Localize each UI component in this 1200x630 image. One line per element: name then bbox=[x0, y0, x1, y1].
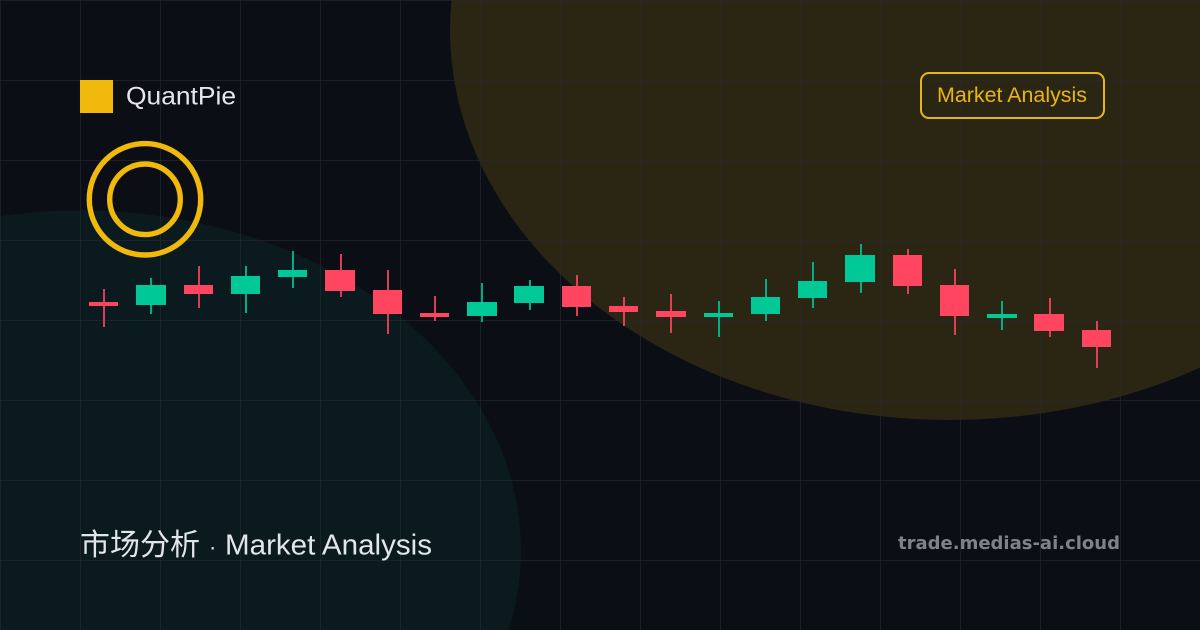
candle 10 bbox=[514, 280, 544, 310]
candle 4 bbox=[231, 266, 260, 313]
candle 16 bbox=[798, 262, 827, 308]
subtitle: 市场分析 bbox=[80, 529, 200, 562]
brand name: QuantPie bbox=[126, 82, 236, 110]
candlestick chart bbox=[89, 244, 1111, 368]
logo bbox=[80, 80, 236, 113]
candle 20 bbox=[987, 301, 1017, 330]
candle 9 bbox=[467, 283, 497, 322]
candle 2 bbox=[136, 278, 166, 314]
subtitle bbox=[80, 529, 432, 562]
candle 21 bbox=[1034, 298, 1064, 337]
candle 18 bbox=[893, 249, 922, 294]
candle 1 bbox=[89, 289, 118, 327]
candle 7 bbox=[373, 270, 402, 334]
badge: market analysis: Market Analysis bbox=[937, 84, 1087, 107]
candle 22 bbox=[1082, 321, 1111, 368]
candle 12 bbox=[609, 297, 638, 326]
candle 14 bbox=[704, 301, 733, 337]
gold background ellipse bbox=[450, 0, 1200, 420]
icon: concentric rings bbox=[89, 144, 201, 255]
subtitle: Market Analysis bbox=[225, 530, 432, 562]
candle 11 bbox=[562, 275, 591, 316]
candle 17 bbox=[845, 244, 875, 293]
candle 6 bbox=[325, 254, 355, 297]
domain footer: trade.medias-ai.cloud bbox=[898, 533, 1120, 554]
subtitle: · bbox=[209, 534, 216, 560]
teal background ellipse bbox=[0, 210, 521, 630]
candle 15 bbox=[751, 279, 780, 321]
candle 13 bbox=[656, 294, 686, 333]
candle 5 bbox=[278, 251, 307, 288]
logo square bbox=[80, 80, 113, 113]
candle 19 bbox=[940, 269, 969, 335]
candle 3 bbox=[184, 266, 213, 308]
badge: market analysis bbox=[921, 73, 1104, 118]
candle 8 bbox=[420, 296, 449, 321]
